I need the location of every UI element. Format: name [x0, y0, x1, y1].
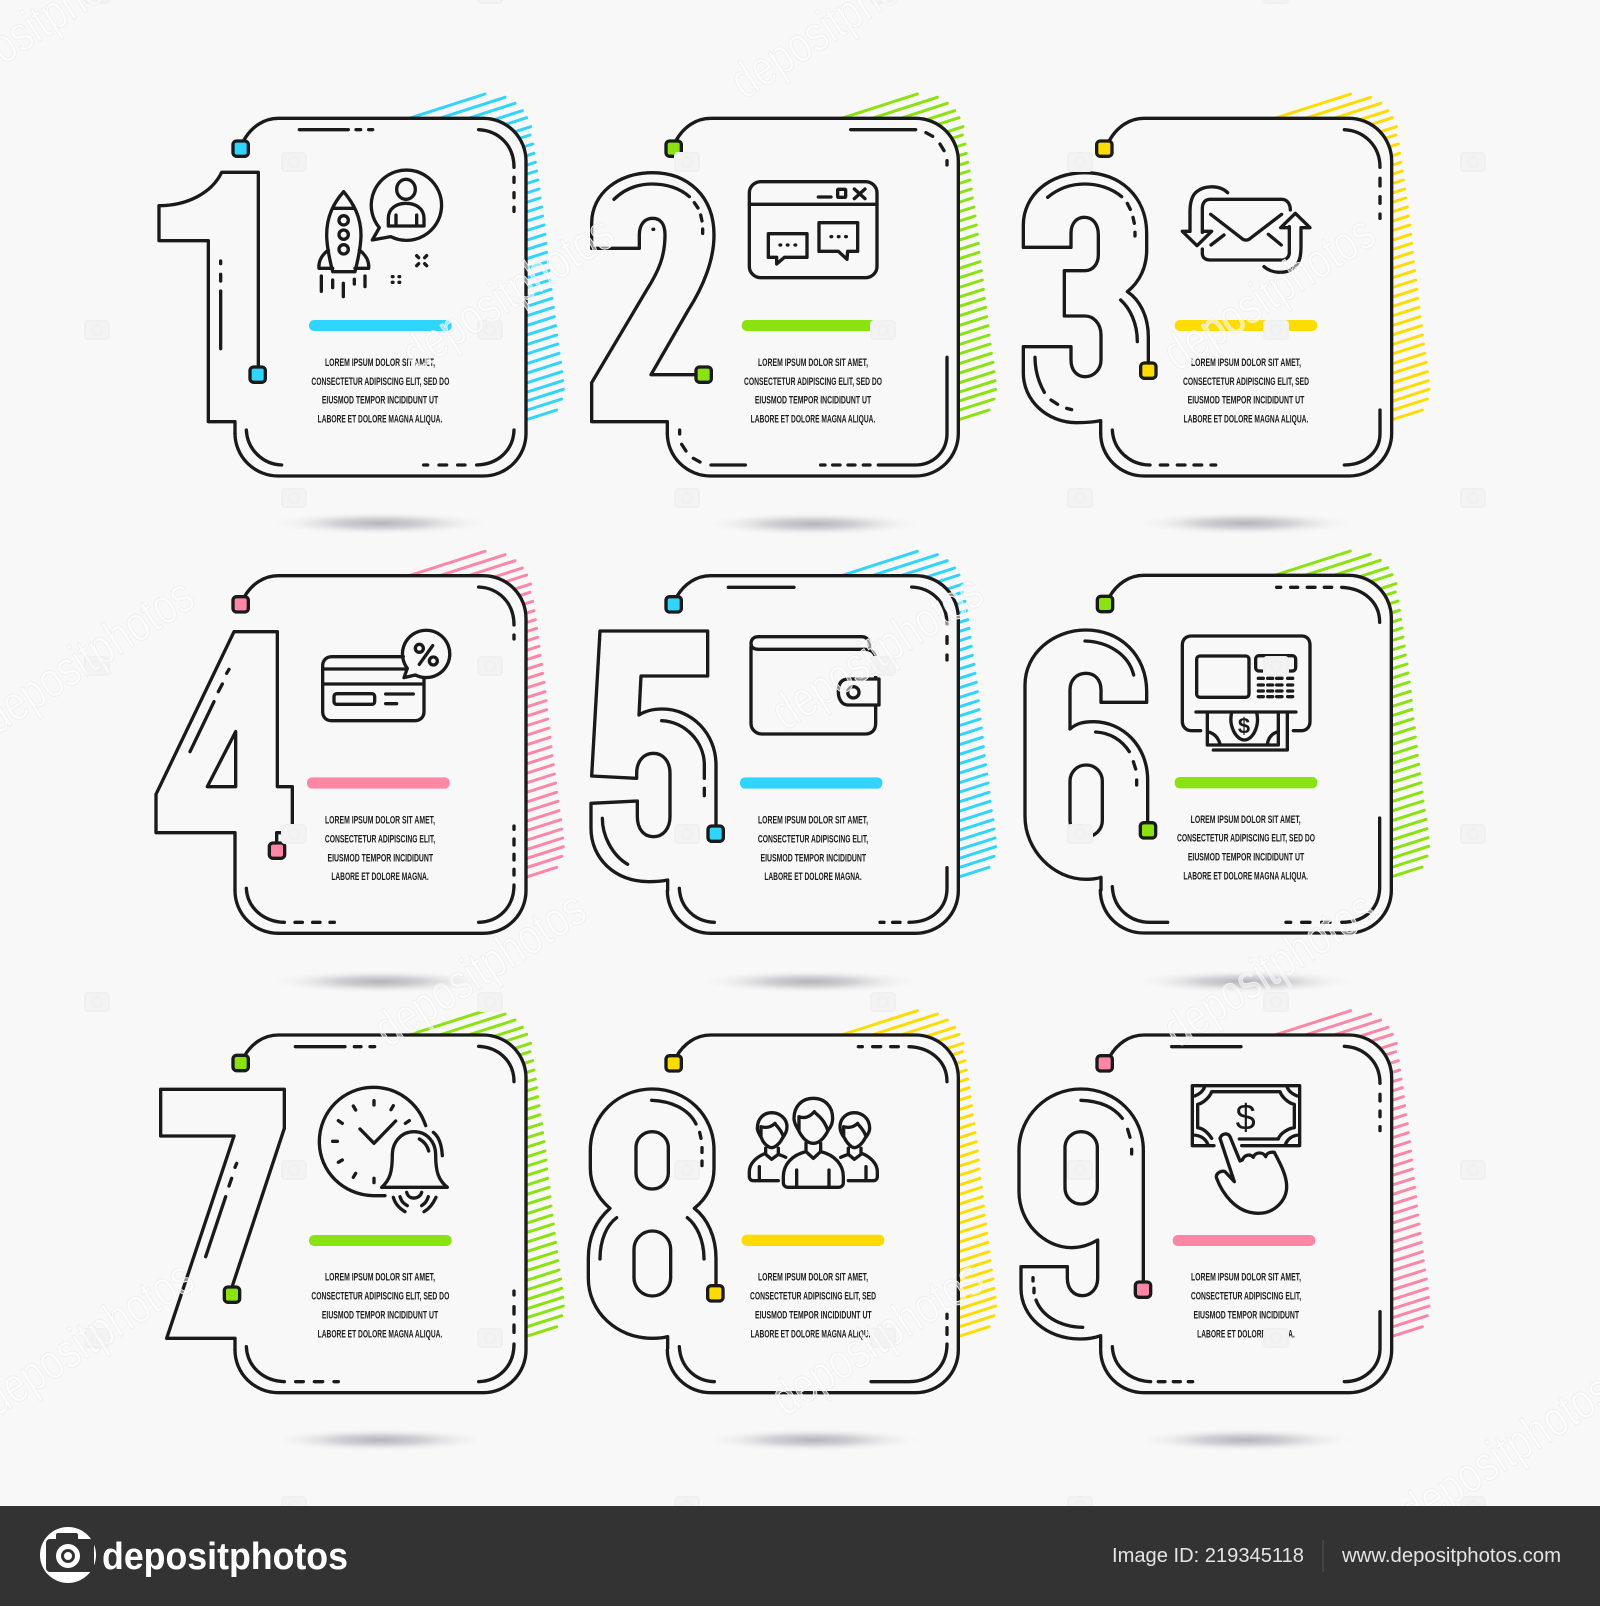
- shadow: [697, 970, 923, 994]
- top node: [1097, 1056, 1112, 1071]
- icon: banknote and pointing hand: $: [1236, 1096, 1256, 1137]
- colour bar: [742, 320, 884, 331]
- text block: LOREM IPSUM DOLOR SIT AMET,: [325, 815, 435, 827]
- top node: [233, 1055, 248, 1071]
- text block: CONSECTETUR ADIPISCING ELIT, SED DO: [311, 376, 450, 388]
- card 2: number two, browser chat: [592, 94, 996, 536]
- stripes: [397, 551, 563, 889]
- colour bar: [1175, 320, 1317, 331]
- icon: clock and alarm bell: [319, 1087, 447, 1212]
- stripes: [1262, 551, 1429, 888]
- icon: ATM: $: [1238, 713, 1250, 738]
- shadow: [267, 970, 493, 994]
- card 3: number three, mail refresh: [1023, 94, 1429, 535]
- shadow: [1132, 1428, 1358, 1452]
- text block: LABORE ET DOLORE MAGNA.: [331, 871, 429, 883]
- digit 6: [1025, 630, 1148, 890]
- text block: CONSECTETUR ADIPISCING ELIT,: [758, 833, 868, 845]
- icon: banknote and pointing hand: [1192, 1086, 1300, 1213]
- text block: [744, 357, 882, 426]
- footer divider: [1322, 1540, 1324, 1572]
- text block: CONSECTETUR ADIPISCING ELIT, SED DO: [311, 1291, 450, 1303]
- bottom node: [708, 1286, 723, 1301]
- text block: CONSECTETUR ADIPISCING ELIT, SED DO: [744, 376, 882, 388]
- bottom node: [1135, 1282, 1151, 1297]
- text block: LABORE ET DOLORE MAGNA ALIQUA.: [318, 414, 442, 426]
- panel: [1100, 575, 1391, 933]
- decorative dashes: [1085, 587, 1380, 922]
- digit 1: [159, 172, 258, 433]
- stripes: [397, 1011, 563, 1348]
- digit 6 counter: [1070, 765, 1102, 837]
- stripes: [1262, 1011, 1429, 1348]
- text block: LOREM IPSUM DOLOR SIT AMET,: [325, 357, 435, 369]
- icon: wallet: [751, 637, 879, 734]
- digit 7: [161, 1089, 284, 1350]
- colour bar: [1173, 1235, 1315, 1246]
- text block: EIUSMOD TEMPOR INCIDIDUNT UT: [755, 395, 871, 407]
- text block: [311, 357, 450, 426]
- decorative dashes: [1033, 1046, 1380, 1382]
- text block: EIUSMOD TEMPOR INCIDIDUNT: [760, 852, 866, 864]
- colour bar: [1175, 777, 1317, 788]
- image id: Image ID: 219345118: [1112, 1545, 1304, 1567]
- text block: LABORE ET DOLORE MAGNA ALIQUA.: [318, 1328, 442, 1340]
- card 9: number nine, cash click: [1019, 1011, 1429, 1452]
- decorative dashes: [206, 1046, 514, 1382]
- text block: LABORE ET DOLORE MAGNA ALIQUA.: [1183, 871, 1308, 883]
- text block: LABORE ET DOLORE MAGNA.: [764, 871, 862, 883]
- watermark text: depositphotos: [761, 563, 993, 741]
- top node: [1097, 596, 1113, 612]
- card 7: number seven, clock and bell: [161, 1011, 563, 1452]
- top node: [666, 141, 681, 156]
- text block: [311, 1272, 450, 1340]
- top node: [666, 597, 681, 612]
- top node: [233, 141, 248, 156]
- digit 9: [1019, 1089, 1143, 1348]
- top node: [1097, 141, 1112, 156]
- panel: [235, 1035, 526, 1393]
- text block: CONSECTETUR ADIPISCING ELIT, SED DO: [1177, 833, 1315, 845]
- panel: [235, 118, 526, 476]
- stripes: [829, 551, 996, 889]
- stripes: [829, 1011, 996, 1348]
- bottom node: [696, 367, 711, 382]
- shadow: [700, 1428, 927, 1452]
- colour bar: [307, 777, 450, 789]
- text block: [325, 815, 435, 883]
- digit 8: [588, 1089, 716, 1348]
- stripes: [829, 94, 996, 431]
- logo wordmark: depositphotos: [102, 1536, 348, 1578]
- icon: envelope with refresh arrows: [1182, 187, 1310, 272]
- text block: CONSECTETUR ADIPISCING ELIT,: [325, 833, 435, 845]
- shadow: [700, 512, 927, 536]
- text block: CONSECTETUR ADIPISCING ELIT, SED: [1183, 376, 1309, 388]
- decorative dashes: [1035, 130, 1380, 465]
- shadow: [1132, 511, 1358, 535]
- text block: LABORE ET DOLORE MAGNA.: [1197, 1328, 1295, 1340]
- panel: [1101, 1035, 1392, 1393]
- decorative dashes: [602, 587, 947, 922]
- icon: credit card with percent bubble: [323, 630, 450, 721]
- text block: [1183, 357, 1309, 426]
- decorative dashes: [221, 130, 514, 465]
- text block: LOREM IPSUM DOLOR SIT AMET,: [1191, 357, 1301, 369]
- shadow: [267, 511, 493, 535]
- bottom node: [224, 1287, 240, 1302]
- panel: [667, 576, 958, 933]
- icon: browser window with chat bubbles: [749, 182, 877, 278]
- logo camera icon: [40, 1527, 96, 1583]
- bottom node: [1141, 363, 1156, 378]
- panel: [1101, 118, 1392, 476]
- top node: [666, 1056, 681, 1071]
- website: www.depositphotos.com: [1341, 1545, 1561, 1567]
- watermark text: depositphotos: [392, 204, 624, 382]
- text block: LOREM IPSUM DOLOR SIT AMET,: [758, 815, 868, 827]
- digit 9 counter: [1065, 1132, 1097, 1204]
- text block: CONSECTETUR ADIPISCING ELIT,: [1191, 1291, 1301, 1303]
- icon: rocket and person bubble: [319, 170, 442, 297]
- text block: LOREM IPSUM DOLOR SIT AMET,: [1191, 814, 1301, 826]
- text block: EIUSMOD TEMPOR INCIDIDUNT UT: [322, 395, 438, 407]
- card 5: number five, wallet: [591, 551, 996, 994]
- stripes: [397, 94, 563, 431]
- digit 5: [591, 631, 716, 891]
- text block: EIUSMOD TEMPOR INCIDIDUNT: [1193, 1310, 1299, 1322]
- bottom node: [708, 826, 723, 841]
- bottom node: [250, 367, 265, 382]
- stripes: [1262, 94, 1429, 431]
- card 4: number four, credit card discount: [156, 551, 563, 994]
- text block: EIUSMOD TEMPOR INCIDIDUNT: [327, 852, 433, 864]
- panel: [667, 118, 958, 476]
- digit 8 counters: [634, 1132, 671, 1296]
- bottom node: [269, 843, 285, 858]
- panel: [235, 576, 526, 933]
- shadow: [267, 1428, 493, 1452]
- text block: LABORE ET DOLORE MAGNA ALIQUA.: [1184, 414, 1308, 426]
- digit 4: [156, 632, 292, 891]
- text block: LOREM IPSUM DOLOR SIT AMET,: [1191, 1272, 1301, 1284]
- decorative dashes: [614, 130, 947, 465]
- text block: EIUSMOD TEMPOR INCIDIDUNT UT: [1188, 395, 1305, 407]
- text block: LABORE ET DOLORE MAGNA ALIQUA.: [751, 1328, 875, 1340]
- card 6: number six, cash machine: [1025, 551, 1429, 994]
- text block: EIUSMOD TEMPOR INCIDIDUNT UT: [1188, 852, 1304, 864]
- decorative dashes: [190, 587, 514, 922]
- text block: LOREM IPSUM DOLOR SIT AMET,: [758, 1272, 868, 1284]
- watermark text: depositphotos: [1153, 204, 1385, 382]
- shadow: [1132, 970, 1358, 994]
- digit 3: [1023, 173, 1148, 433]
- watermark text: depositphotos: [761, 1249, 993, 1427]
- text block: [1177, 814, 1315, 883]
- icon: ATM: [1182, 636, 1310, 750]
- digit 2: [592, 173, 714, 433]
- watermark text: depositphotos: [1153, 880, 1385, 1058]
- text block: [1191, 1272, 1301, 1340]
- text block: EIUSMOD TEMPOR INCIDIDUNT UT: [755, 1310, 872, 1322]
- text block: [758, 815, 868, 883]
- card 8: number eight, team: [588, 1011, 996, 1452]
- colour bar: [740, 777, 882, 789]
- bottom node: [1140, 823, 1156, 838]
- decorative dashes: [600, 1047, 947, 1382]
- text block: LOREM IPSUM DOLOR SIT AMET,: [758, 357, 868, 369]
- footer band: [0, 1506, 1600, 1606]
- colour bar: [309, 320, 452, 331]
- text block: EIUSMOD TEMPOR INCIDIDUNT UT: [322, 1310, 438, 1322]
- card 1: number one, rocket and person: [159, 94, 563, 535]
- text block: LOREM IPSUM DOLOR SIT AMET,: [325, 1272, 435, 1284]
- panel: [667, 1035, 958, 1393]
- text block: LABORE ET DOLORE MAGNA ALIQUA.: [751, 414, 875, 426]
- colour bar: [742, 1235, 884, 1246]
- watermark text: depositphotos: [364, 880, 596, 1058]
- icon: three people: [749, 1098, 877, 1187]
- top node: [233, 597, 248, 612]
- text block: CONSECTETUR ADIPISCING ELIT, SED: [750, 1291, 876, 1303]
- text block: [750, 1272, 876, 1340]
- colour bar: [309, 1235, 452, 1246]
